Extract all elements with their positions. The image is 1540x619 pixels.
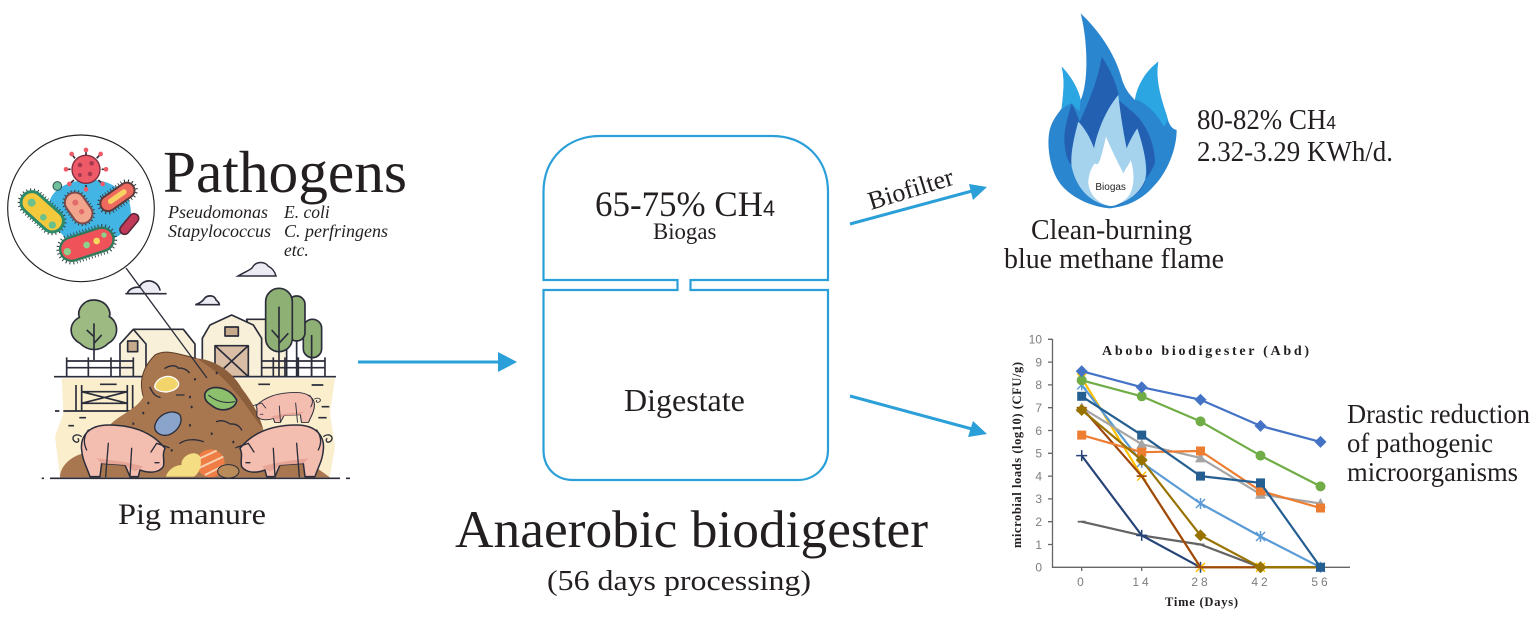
pathogen names: E. coli xyxy=(283,202,330,222)
pathogen names: C. perfringens xyxy=(284,221,388,241)
outer flame xyxy=(1048,13,1177,208)
y tick labels: 7 xyxy=(1035,401,1042,415)
flame caption xyxy=(1004,214,1224,275)
yellow bacterium xyxy=(17,187,68,236)
illustration: pig farm with manure pile xyxy=(42,281,350,478)
chart caption: microorganisms xyxy=(1347,457,1518,487)
manure pile xyxy=(60,352,330,477)
left tree xyxy=(71,300,117,360)
chart caption xyxy=(1347,399,1530,487)
pathogen names: etc. xyxy=(284,240,309,260)
biogas label: 65-75% CH4 xyxy=(595,184,775,224)
pathogen names: Stapylococcus xyxy=(168,221,271,241)
flame caption: Clean-burning xyxy=(1031,214,1192,246)
flame stats xyxy=(1197,105,1393,168)
label: Biofilter: Biofilter xyxy=(864,162,957,216)
food bits xyxy=(166,453,201,477)
orange bacterium xyxy=(97,180,138,214)
cloud xyxy=(238,262,276,276)
x tick labels xyxy=(1077,575,1331,589)
chart caption: of pathogenic xyxy=(1347,428,1493,458)
digester vessel xyxy=(544,136,828,480)
x tick labels: 42 xyxy=(1251,575,1271,589)
axes xyxy=(1048,339,1350,571)
heading: Pathogens: Pathogens xyxy=(163,139,407,205)
magnifier circle with pathogens xyxy=(8,135,154,282)
x axis title: Time (Days) xyxy=(1165,595,1238,609)
line chart: microbial loads xyxy=(1010,332,1350,609)
inner light flame xyxy=(1071,95,1146,206)
blue blob xyxy=(48,180,131,244)
green cell xyxy=(53,182,62,190)
dark left band xyxy=(1064,103,1080,167)
right tongue highlight xyxy=(1135,62,1167,127)
dark right band xyxy=(1113,100,1155,207)
pile details xyxy=(133,366,242,451)
arrow: manure to digester xyxy=(358,352,517,372)
y tick labels: 1 xyxy=(1035,538,1042,552)
y tick labels: 0 xyxy=(1035,560,1042,574)
x tick labels: 14 xyxy=(1132,575,1152,589)
pink bacterium xyxy=(61,189,96,227)
biogas label xyxy=(595,184,775,244)
orange chunk xyxy=(197,449,225,477)
white core xyxy=(1088,137,1134,206)
heading: Anaerobic biodigester: Anaerobic biodigester xyxy=(455,501,928,559)
left tongue highlight xyxy=(1060,67,1081,112)
x tick labels: 28 xyxy=(1191,575,1211,589)
label: Pig manure: Pig manure xyxy=(118,498,266,531)
y tick labels xyxy=(1029,332,1042,574)
red bacterium xyxy=(57,225,117,264)
flame label: Biogas xyxy=(1095,182,1126,193)
chart title: Abobo biodigester (Abd) xyxy=(1102,344,1309,359)
x tick labels: 56 xyxy=(1311,575,1331,589)
biogas label: Biogas xyxy=(653,219,716,244)
clouds xyxy=(126,281,219,305)
y tick labels: 4 xyxy=(1035,470,1042,484)
y tick labels: 8 xyxy=(1035,378,1042,392)
y tick labels: 6 xyxy=(1035,424,1042,438)
arrow: biofilter xyxy=(850,184,987,224)
dark centre xyxy=(1079,57,1119,148)
y tick labels: 9 xyxy=(1035,356,1042,370)
y tick labels: 3 xyxy=(1035,492,1042,506)
y tick labels: 2 xyxy=(1035,515,1042,529)
flame stats: 2.32-3.29 KWh/d. xyxy=(1197,137,1393,168)
pigs xyxy=(253,392,320,422)
flame caption: blue methane flame xyxy=(1004,243,1224,275)
green chunk xyxy=(205,388,237,410)
blue chunk xyxy=(155,412,181,435)
yellow chunk xyxy=(155,376,179,392)
y axis title: microbial loads (log10) (CFU/g) xyxy=(1010,362,1024,548)
virus xyxy=(64,148,108,192)
arrow: digestate to chart xyxy=(850,396,987,437)
right trees xyxy=(266,288,322,377)
barns xyxy=(120,315,287,377)
x tick labels: 0 xyxy=(1077,575,1087,589)
data series xyxy=(1082,371,1320,567)
y tick labels: 10 xyxy=(1029,332,1042,346)
magnifier line xyxy=(126,268,207,378)
y tick labels: 5 xyxy=(1035,446,1042,460)
red rod xyxy=(118,212,141,236)
ground background xyxy=(55,378,335,477)
fences and ground line xyxy=(42,357,350,478)
flame stats: 80-82% CH4 xyxy=(1197,105,1336,136)
subheading: processing time: (56 days processing) xyxy=(547,565,811,597)
icon: blue flame xyxy=(1048,13,1177,208)
digestate label: Digestate xyxy=(624,382,745,418)
chart caption: Drastic reduction xyxy=(1347,399,1530,429)
pathogen names: Pseudomonas xyxy=(167,202,268,222)
pathogen names xyxy=(167,202,388,260)
